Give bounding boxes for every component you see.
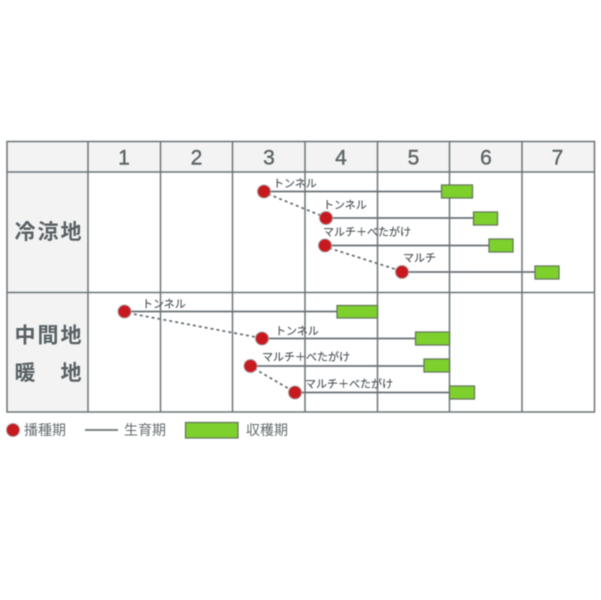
month headers [118, 146, 563, 170]
intermediate and warm area schedule [118, 298, 474, 399]
month headers: 3 [263, 146, 275, 170]
intermediate and warm area schedule: トンネル [275, 324, 319, 338]
intermediate and warm area schedule: トンネル [142, 298, 186, 310]
calendar grid [7, 142, 594, 412]
cool area schedule: トンネル [323, 198, 367, 212]
legend [6, 422, 288, 438]
month headers: 4 [335, 146, 347, 170]
legend: 播種期 [24, 422, 66, 438]
region label: warm area second character: 地 [60, 362, 84, 385]
month headers: 7 [552, 146, 563, 170]
cool area schedule: トンネル [273, 177, 317, 190]
region label: warm area: 暖 [14, 362, 38, 385]
cool area schedule: マルチ [403, 252, 436, 264]
region label: intermediate area: 中間地 [14, 324, 84, 348]
intermediate and warm area schedule: マルチ＋べたがけ [305, 376, 393, 390]
month headers: 2 [191, 146, 202, 170]
month headers: 1 [118, 146, 130, 170]
cool area schedule [258, 177, 559, 279]
intermediate and warm area schedule: マルチ＋べたがけ [262, 350, 350, 364]
legend: 生育期 [124, 422, 166, 438]
month headers: 6 [480, 146, 492, 170]
legend: 収穫期 [246, 422, 288, 438]
cool area schedule: マルチ＋べたがけ [323, 224, 411, 238]
month headers: 5 [408, 146, 419, 170]
region label: cool area: 冷涼地 [14, 221, 84, 244]
